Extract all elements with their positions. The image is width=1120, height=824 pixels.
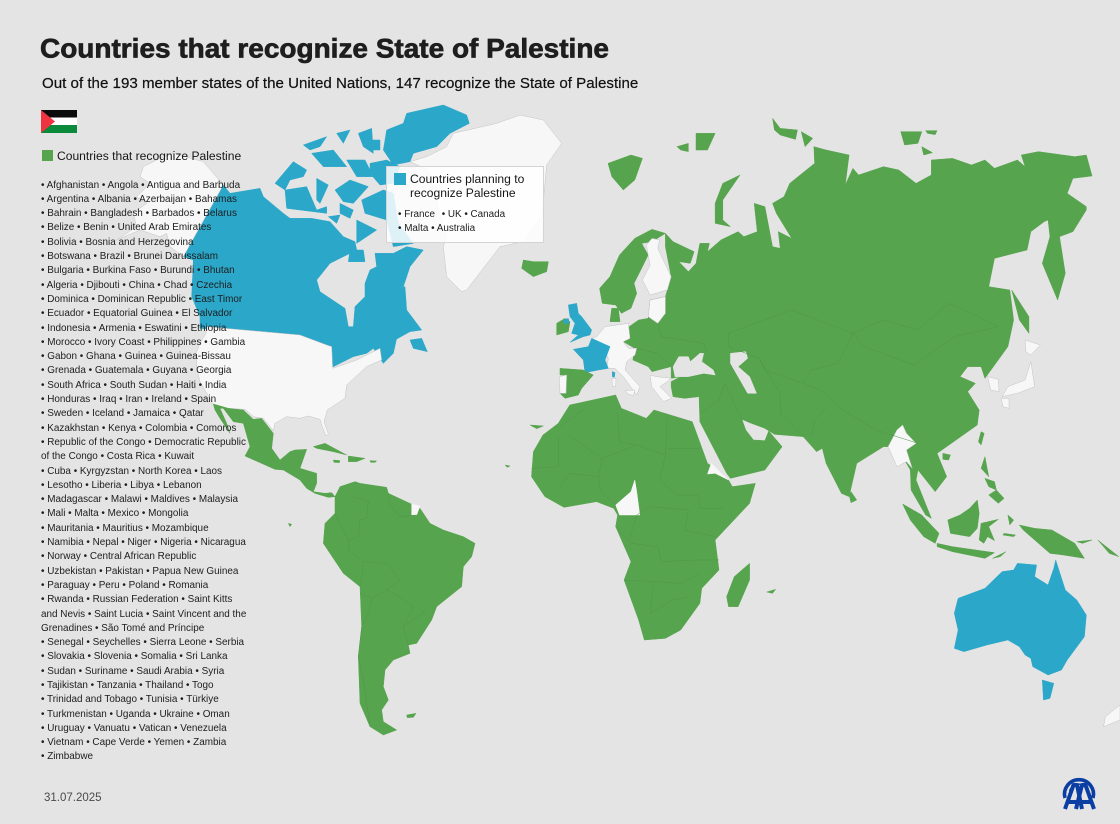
text block: list of recognizing countries: Grenadines • São Tomé and Príncipe: [41, 623, 204, 634]
planned countries list: • France • UK • Canada: [398, 208, 505, 220]
text block: list of recognizing countries: • Uzbekistan • Pakistan • Papua New Guinea: [41, 566, 238, 577]
text block: list of recognizing countries: • Mauritania • Mauritius • Mozambique: [41, 523, 209, 534]
text block: list of recognizing countries: • Slovakia • Slovenia • Somalia • Sri Lanka: [41, 651, 228, 662]
map: Northern Ireland: [563, 318, 569, 323]
text block: list of recognizing countries: • Bulgaria • Burkina Faso • Burundi • Bhutan: [41, 265, 235, 276]
map: Finland: [642, 238, 671, 295]
text block: list of recognizing countries: • Rwanda • Russian Federation • Saint Kitts: [41, 594, 232, 605]
map: Canadian Arctic islands: [275, 105, 469, 363]
text block: list of recognizing countries: [41, 180, 246, 762]
map: Caspian Sea: [730, 352, 756, 393]
text block: list of recognizing countries: • Republic of the Congo • Democratic Republic: [41, 437, 246, 448]
map: Greenland: [410, 115, 562, 292]
map: Japan: [1001, 340, 1040, 408]
text block: list of recognizing countries: • Norway • Central African Republic: [41, 551, 196, 562]
map: Asia borders: [635, 303, 998, 443]
map: Baltic states: [648, 297, 665, 323]
map: Africa and Oceania: [531, 395, 1120, 727]
map: Caribbean islands: [288, 425, 543, 718]
text block: list of recognizing countries: • Afghanistan • Angola • Antigua and Barbuda: [41, 180, 240, 191]
map: Iceland: [522, 260, 548, 277]
planned countries list: • Malta • Australia: [398, 223, 475, 234]
text block: list of recognizing countries: • Mali • Malta • Mexico • Mongolia: [41, 508, 188, 519]
map: Western Europe: [557, 303, 672, 402]
map: South America: [323, 482, 475, 735]
text block: list of recognizing countries: • Madagascar • Malawi • Maldives • Malaysia: [41, 494, 238, 505]
map: Timor: [993, 552, 1006, 558]
map: Latin America: [213, 404, 543, 735]
map: Russia and Asia mainland: [623, 147, 1092, 518]
icon: Palestinian flag: [41, 110, 77, 133]
date: 31.07.2025: [44, 792, 102, 804]
map: Spain: [560, 368, 593, 398]
text block: list of recognizing countries: • Vietnam • Cape Verde • Yemen • Zambia: [41, 737, 226, 748]
text block: list of recognizing countries: • Dominica • Dominican Republic • East Timor: [41, 294, 242, 305]
map: Africa borders: [531, 410, 723, 613]
map: Java and Lesser Sunda: [937, 543, 994, 558]
map: South Korea: [988, 377, 999, 392]
callout heading: [410, 172, 524, 200]
text block: list of recognizing countries: • South Africa • South Sudan • Haiti • India: [41, 380, 226, 391]
text block: list of recognizing countries: • Bahrain • Bangladesh • Barbados • Belarus: [41, 208, 237, 219]
text block: list of recognizing countries: • Zimbabwe: [41, 751, 93, 762]
text block: list of recognizing countries: • Namibia • Nepal • Niger • Nigeria • Nicaragua: [41, 537, 246, 548]
icon: AA logo: [1062, 778, 1096, 810]
map: Tasmania: [1042, 680, 1054, 700]
map: Africa: [531, 395, 755, 640]
map: Sicily: [625, 390, 635, 396]
text block: list of recognizing countries: • Paraguay • Peru • Poland • Romania: [41, 580, 208, 591]
map: Canada mainland: [163, 185, 423, 368]
map: Madagascar: [727, 563, 750, 607]
text block: list of recognizing countries: • Kazakhstan • Kenya • Colombia • Comoros: [41, 423, 236, 434]
text block: list of recognizing countries: • Morocco • Ivory Coast • Philippines • Gambia: [41, 337, 245, 348]
map: Philippines: [981, 457, 1004, 503]
map: Eurasia: [600, 118, 1092, 518]
map: Sardinia: [612, 378, 616, 387]
subtitle: Out of the 193 member states of the United Nations, 147 recognize the State of Palestine: [42, 74, 638, 92]
map: small Indonesian and Pacific islands: [767, 515, 1119, 593]
legend: recognizing countries: [42, 149, 241, 163]
text block: list of recognizing countries: • Gabon • Ghana • Guinea • Guinea-Bissau: [41, 351, 231, 362]
map: France: [573, 338, 610, 373]
legend swatch: green: [42, 150, 53, 161]
text block: list of recognizing countries: • Sweden • Iceland • Jamaica • Qatar: [41, 408, 204, 419]
map: Hainan: [943, 453, 950, 460]
map: USA: [196, 327, 382, 436]
map: UK: [568, 303, 592, 342]
text block: list of recognizing countries: • Sudan • Suriname • Saudi Arabia • Syria: [41, 666, 224, 677]
map: Arctic islands: [608, 118, 937, 227]
map: Sumatra: [903, 504, 939, 543]
map: Alaska cover: [117, 153, 223, 257]
map: Cameroon: [616, 480, 640, 515]
text block: list of recognizing countries: • Indonesia • Armenia • Eswatini • Ethiopia: [41, 323, 226, 334]
text block: list of recognizing countries: • Uruguay • Vanuatu • Vatican • Venezuela: [41, 723, 227, 734]
map: Mexico and Central America: [213, 404, 335, 497]
text block: list of recognizing countries: • Ecuador • Equatorial Guinea • El Salvador: [41, 308, 232, 319]
map: Taiwan: [978, 432, 984, 445]
map: North America north: [117, 105, 562, 368]
title: Countries that recognize State of Palestine: [40, 34, 609, 64]
callout heading: Countries planning to: [410, 172, 524, 186]
map: Ireland: [557, 318, 570, 335]
text block: list of recognizing countries: • Trinidad and Tobago • Tunisia • Türkiye: [41, 694, 219, 705]
text block: list of recognizing countries: and Nevis • Saint Lucia • Saint Vincent and the: [41, 608, 246, 620]
text block: list of recognizing countries: • Botswana • Brazil • Brunei Darussalam: [41, 251, 218, 262]
map: Sulawesi: [979, 519, 998, 543]
callout: countries planning to recognize Palestine: [386, 166, 544, 243]
map: Denmark: [610, 308, 620, 322]
planned countries list: [398, 208, 506, 234]
map: Eritrea: [707, 463, 729, 480]
callout heading: recognize Palestine: [410, 186, 516, 200]
text block: list of recognizing countries: • Bolivia • Bosnia and Herzegovina: [41, 237, 194, 248]
map: Greece: [650, 375, 672, 402]
map: Myanmar: [888, 425, 916, 468]
text block: list of recognizing countries: • Algeria • Djibouti • China • Chad • Czechia: [41, 280, 232, 291]
map: New Guinea: [1019, 525, 1084, 558]
map: Sakhalin: [1012, 290, 1029, 333]
text block: list of recognizing countries: • Cuba • Kyrgyzstan • North Korea • Laos: [41, 466, 222, 477]
map: New Zealand: [1104, 705, 1120, 727]
map: Australia: [954, 560, 1086, 675]
map: French Guiana: [412, 504, 420, 515]
text block: list of recognizing countries: • Lesotho • Liberia • Libya • Lebanon: [41, 480, 202, 491]
text block: list of recognizing countries: • Belize • Benin • United Arab Emirates: [41, 222, 211, 233]
text block: list of recognizing countries: • Honduras • Iraq • Iran • Ireland • Spain: [41, 394, 216, 405]
map: Germany and neighbours: [592, 323, 640, 395]
map: Black Sea: [673, 353, 715, 377]
legend swatch: blue: [394, 173, 406, 185]
map: Norway and Sweden: [600, 229, 665, 313]
map: Portugal: [559, 375, 567, 393]
text block: list of recognizing countries: • Grenada • Guatemala • Guyana • Georgia: [41, 365, 231, 376]
map: Sri Lanka: [849, 492, 857, 503]
map: Corsica: [612, 372, 615, 377]
text block: list of recognizing countries: • Tajikistan • Tanzania • Thailand • Togo: [41, 680, 214, 691]
map: South America borders: [335, 493, 427, 727]
text block: list of recognizing countries: • Argentina • Albania • Azerbaijan • Bahamas: [41, 194, 237, 205]
text block: list of recognizing countries: • Turkmenistan • Uganda • Ukraine • Oman: [41, 709, 230, 720]
text block: list of recognizing countries: • Senegal • Seychelles • Sierra Leone • Serbia: [41, 637, 244, 648]
legend label: Countries that recognize Palestine: [57, 149, 241, 163]
map: Borneo: [948, 500, 979, 537]
text block: list of recognizing countries: of the Congo • Costa Rica • Kuwait: [41, 451, 194, 462]
